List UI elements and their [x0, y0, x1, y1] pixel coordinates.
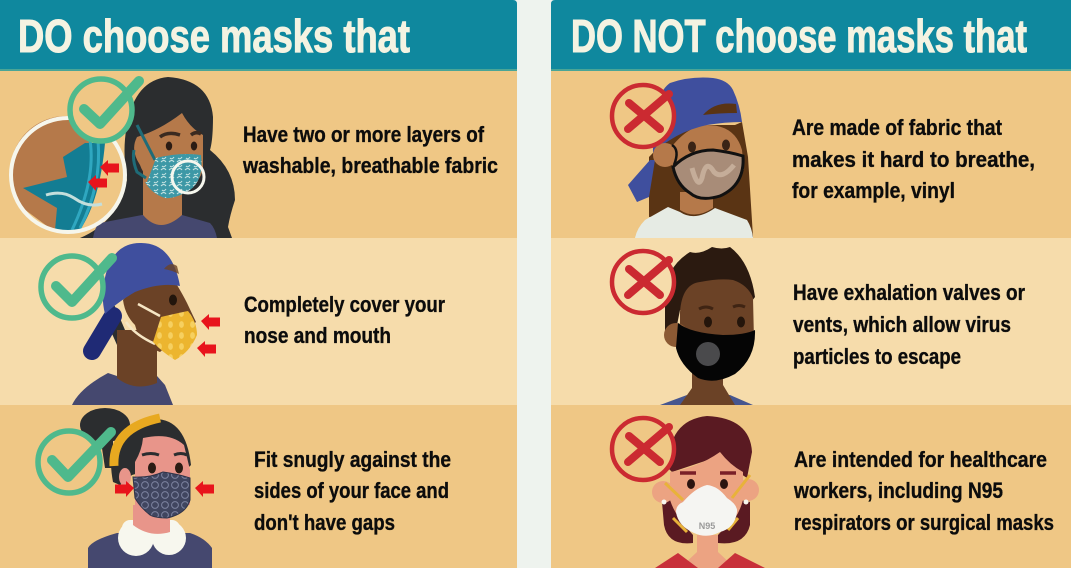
- text: fit snugly: sides of your face and: [254, 478, 449, 503]
- row 2 background: [551, 238, 1071, 405]
- text: fabric hard to breathe: [792, 115, 1035, 203]
- row 1 background: [0, 71, 517, 238]
- text: healthcare workers: [793, 447, 1054, 535]
- row 3 background: [0, 405, 517, 568]
- icon: green check: [38, 431, 111, 493]
- icon: red arrows on fabric: [88, 160, 119, 191]
- illustration: woman with headband and patterned mask: [38, 408, 214, 568]
- text: cover nose and mouth: [244, 292, 445, 348]
- text: two or more layers: [242, 122, 498, 178]
- icon: red cross: [612, 85, 674, 147]
- illustration: man with exhalation valve mask: [612, 247, 755, 405]
- text: fabric hard to breathe: Are made of fabric that: [792, 115, 1002, 140]
- icon: red cross: [612, 251, 674, 313]
- right header band: [551, 0, 1071, 71]
- row 2 background: [0, 238, 517, 405]
- panel: do not choose: [551, 0, 1071, 568]
- text: fit snugly: don't have gaps: [254, 510, 395, 535]
- text: two or more layers: washable, breathable fabric: [242, 153, 498, 178]
- text: healthcare workers: workers, including N95: [793, 478, 1003, 503]
- text: exhalation valves: particles to escape: [793, 344, 961, 369]
- magnified fabric inset: [10, 116, 125, 232]
- icon: red arrows at nose and mouth: [197, 314, 220, 357]
- icon: green check: [41, 256, 112, 318]
- panel: do choose: [0, 0, 517, 568]
- text: exhalation valves: Have exhalation valves or: [793, 280, 1025, 305]
- text: cover nose and mouth: nose and mouth: [244, 323, 391, 348]
- left header band: [0, 0, 517, 71]
- text: two or more layers: Have two or more layers of: [243, 122, 484, 147]
- text: fit snugly: [254, 447, 451, 535]
- text: fabric hard to breathe: makes it hard to breathe,: [792, 147, 1035, 172]
- text: cover nose and mouth: Completely cover your: [244, 292, 445, 317]
- text: exhalation valves: [793, 280, 1025, 369]
- icon: red cross: [612, 418, 674, 480]
- illustration: woman with layered fabric mask: [10, 77, 235, 238]
- N95 label: N95: [699, 521, 715, 531]
- row 1 background: [551, 71, 1071, 238]
- illustration: woman with N95 respirator: [612, 416, 765, 568]
- icon: red arrows at sides of face: [115, 481, 214, 497]
- white collar: [118, 520, 186, 556]
- text: fit snugly: Fit snugly against the: [254, 447, 451, 472]
- icon: green check: [70, 79, 139, 141]
- row 3 background: [551, 405, 1071, 568]
- text: fabric hard to breathe: for example, vinyl: [792, 178, 955, 203]
- text: exhalation valves: vents, which allow virus: [793, 312, 1011, 337]
- illustration: man in side profile with cap: [41, 243, 220, 405]
- illustration: person with vinyl mask: [612, 78, 753, 238]
- heading: do choose: DO choose masks that: [18, 10, 410, 62]
